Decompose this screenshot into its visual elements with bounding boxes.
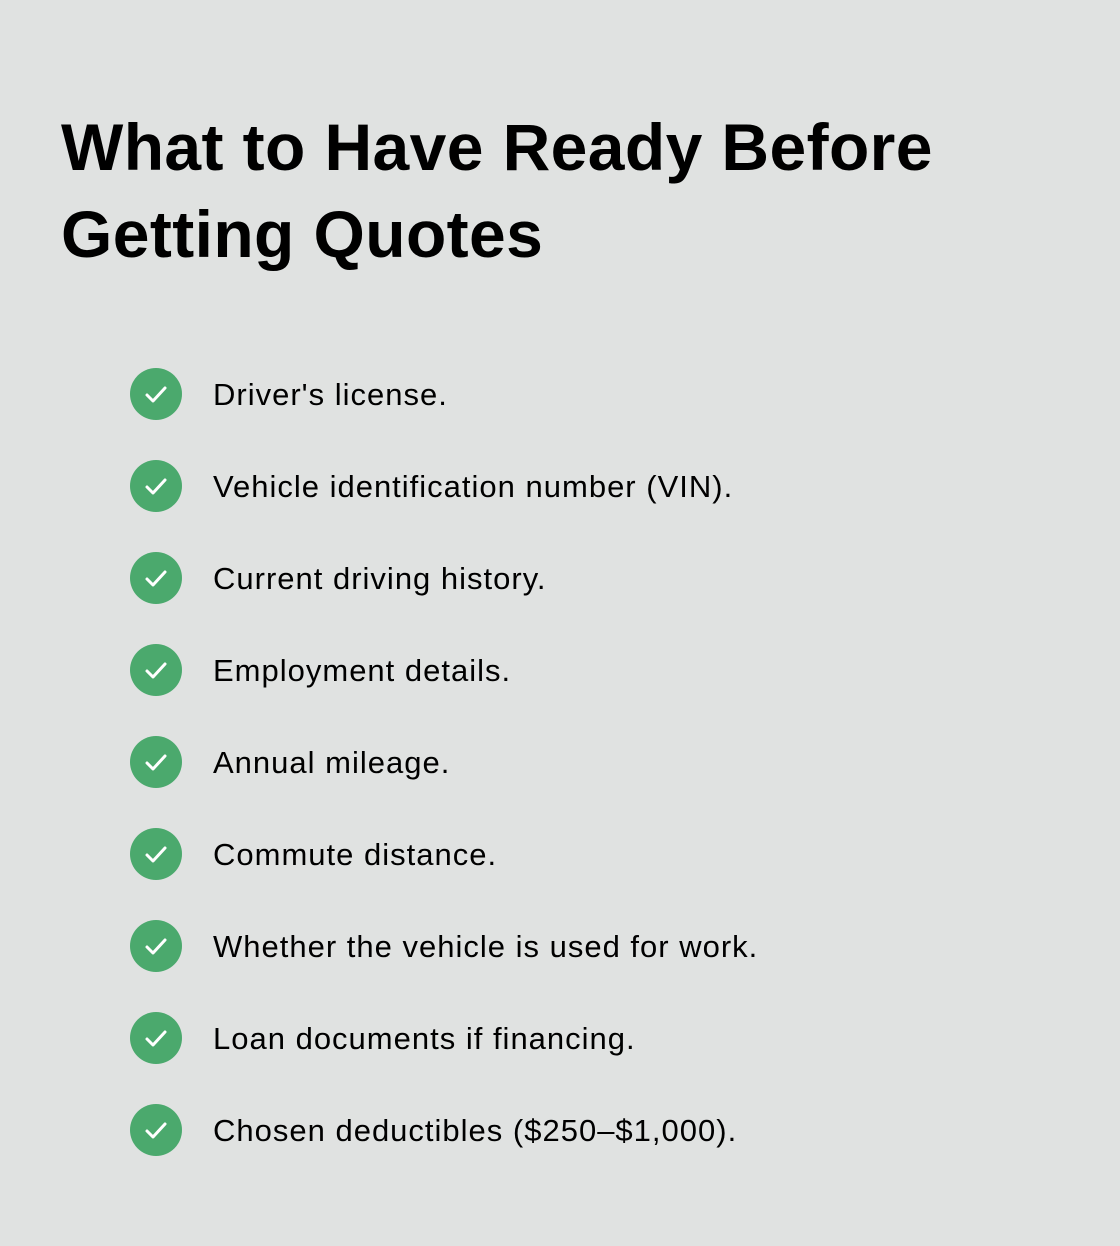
item 6	[130, 828, 497, 880]
title	[61, 110, 933, 271]
item 1: Driver's license.	[213, 377, 448, 412]
item 7: Whether the vehicle is used for work.	[213, 929, 758, 964]
item 6: Commute distance.	[213, 837, 497, 872]
item 5	[130, 736, 450, 788]
item 8: Loan documents if financing.	[213, 1021, 636, 1056]
item 9: Chosen deductibles ($250–$1,000).	[213, 1113, 737, 1148]
item 3	[130, 552, 547, 604]
title: Getting Quotes	[61, 197, 543, 271]
item 2: Vehicle identification number (VIN).	[213, 469, 733, 504]
item 1	[130, 368, 448, 420]
item 3: Current driving history.	[213, 561, 547, 596]
item 8	[130, 1012, 636, 1064]
item 5: Annual mileage.	[213, 745, 450, 780]
item 4	[130, 644, 511, 696]
title: What to Have Ready Before	[61, 110, 933, 184]
item 2	[130, 460, 733, 512]
item 4: Employment details.	[213, 653, 511, 688]
item 9	[130, 1104, 737, 1156]
item 7	[130, 920, 758, 972]
